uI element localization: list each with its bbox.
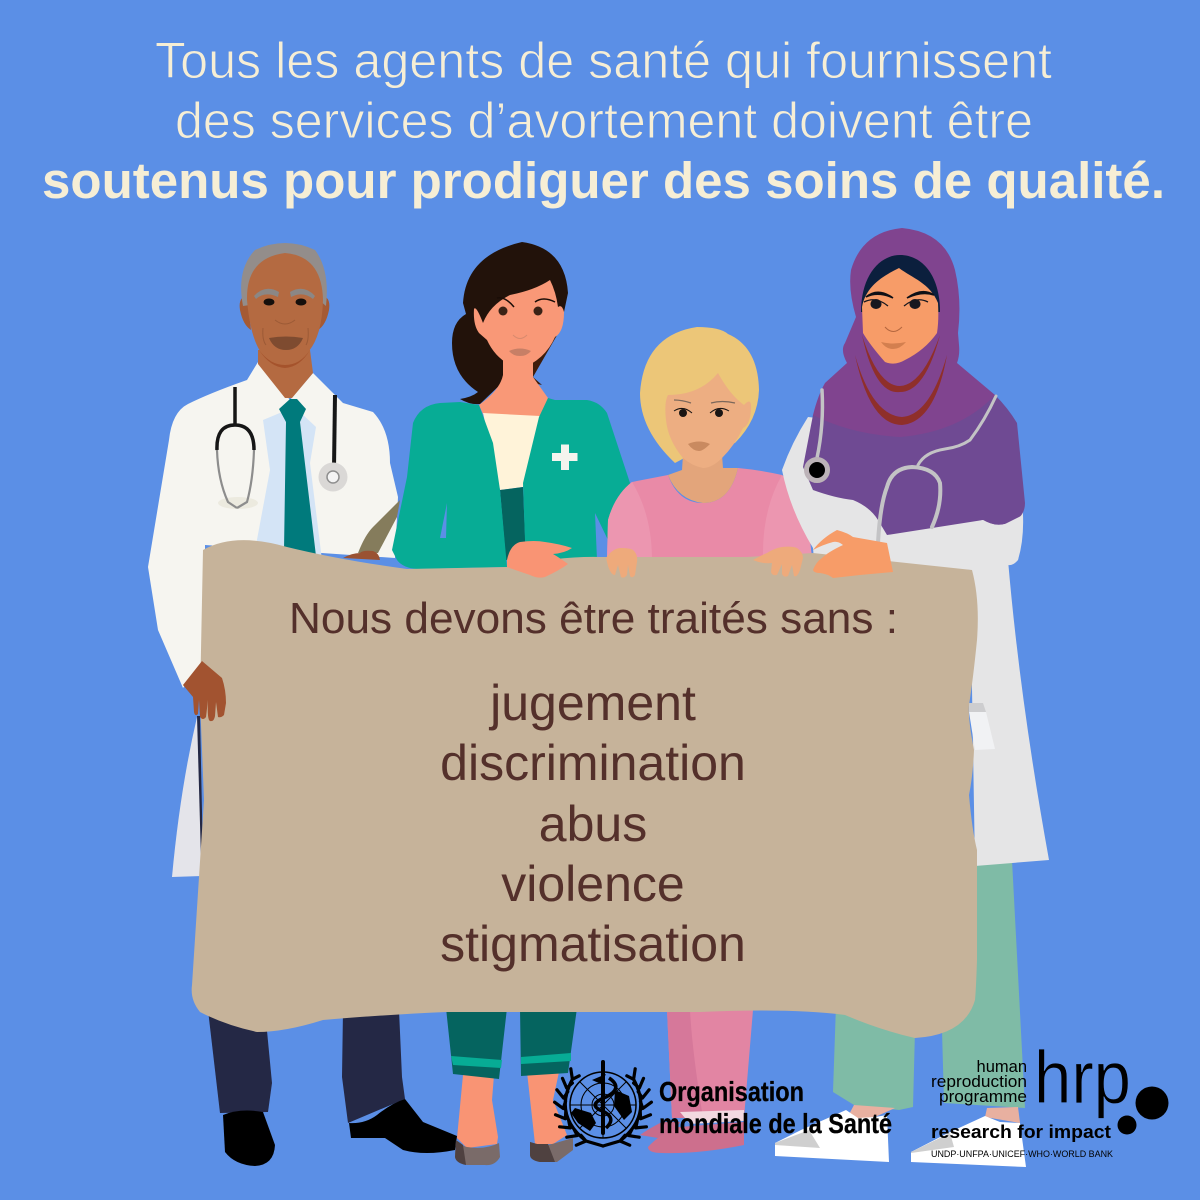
doctor shirt	[256, 410, 322, 560]
doctor neck	[258, 350, 313, 398]
banner list: stigmatisation	[440, 916, 746, 972]
doctor left hand	[183, 661, 226, 721]
WHO wordmark	[659, 1076, 892, 1139]
colleague neck	[668, 455, 738, 503]
HRP tagline: research for impact	[931, 1122, 1111, 1142]
HRP dots	[1118, 1086, 1168, 1134]
woman coat sleeve	[887, 515, 1023, 575]
title	[42, 32, 1165, 209]
figure: male doctor	[148, 243, 457, 1166]
colleague face	[665, 373, 751, 468]
woman hair	[861, 255, 940, 312]
banner list: jugement	[488, 675, 696, 731]
doctor coat	[148, 362, 398, 688]
colleague shoes	[640, 1110, 744, 1153]
title: des services d’avortement doivent être	[175, 92, 1033, 149]
nurse features	[497, 298, 555, 356]
nurse hair	[452, 242, 568, 404]
HRP logo	[931, 1036, 1168, 1159]
nurse trousers	[446, 1008, 577, 1079]
banner list: discrimination	[440, 735, 746, 791]
nurse hair back	[520, 300, 565, 385]
banner list: violence	[501, 856, 685, 912]
HRP partners: UNDP·UNFPA·UNICEF·WHO·WORLD BANK	[931, 1149, 1113, 1159]
colleague features	[674, 400, 735, 451]
nurse sleeve notch	[440, 503, 447, 538]
doctor ears	[240, 296, 329, 330]
colleague sleeves	[607, 475, 812, 560]
woman shoes	[775, 1110, 1026, 1167]
colleague shirt	[607, 468, 812, 560]
nurse shoes	[455, 1138, 573, 1165]
HRP small text: human	[977, 1058, 1027, 1076]
doctor strap and right hand	[343, 500, 400, 560]
woman lower scarf	[803, 395, 1025, 535]
nurse hand	[507, 541, 572, 578]
nurse top	[483, 413, 540, 560]
colleague trousers	[667, 1010, 753, 1118]
nurse legs	[457, 1072, 567, 1148]
banner heading: Nous devons être traités sans :	[289, 594, 898, 643]
HRP small text: reproduction	[931, 1073, 1027, 1091]
emblem staff and serpent	[595, 1062, 616, 1133]
doctor stethoscope	[217, 387, 348, 509]
woman trousers	[833, 860, 1025, 1110]
doctor trousers and shoes	[208, 1010, 457, 1166]
doctor chin shadow	[259, 350, 310, 368]
colleague left hand	[606, 548, 637, 578]
nurse cardigan	[392, 398, 630, 569]
title: soutenus pour prodiguer des soins de qualité.	[42, 152, 1165, 209]
emblem continents	[571, 1074, 632, 1131]
colleague trouser shade	[667, 1010, 703, 1118]
doctor hair	[241, 243, 327, 306]
emblem globe	[570, 1072, 636, 1138]
woman ankles	[846, 1105, 1020, 1123]
emblem left laurel	[555, 1069, 603, 1146]
WHO wordmark: Organisation	[659, 1076, 804, 1107]
woman hand	[813, 530, 893, 578]
HRP letters: hrp	[1034, 1036, 1131, 1119]
doctor coat lower left	[172, 717, 202, 877]
nurse face	[474, 280, 564, 369]
banner	[192, 540, 978, 1038]
woman hijab	[813, 228, 995, 437]
colleague hair	[640, 327, 759, 463]
woman coat pocket	[969, 703, 995, 750]
banner list	[440, 675, 746, 972]
hijab folds	[855, 335, 947, 425]
nurse neck and chest	[479, 350, 548, 417]
HRP small text	[931, 1058, 1027, 1106]
WHO wordmark: mondiale de la Santé	[659, 1108, 892, 1139]
doctor features	[254, 289, 315, 350]
emblem right laurel	[603, 1069, 651, 1146]
colleague right hand	[753, 547, 803, 577]
doctor tie	[279, 399, 316, 556]
figure: blonde colleague	[607, 327, 812, 1153]
HRP small text: programme	[939, 1088, 1027, 1106]
figure: nurse	[392, 242, 630, 1165]
woman features	[864, 292, 934, 349]
woman stethoscope	[806, 390, 996, 543]
title: Tous les agents de santé qui fournissent	[155, 32, 1052, 89]
WHO emblem	[555, 1062, 651, 1146]
doctor face	[247, 253, 323, 367]
nurse cross badge	[552, 444, 578, 470]
woman coat	[782, 417, 1049, 866]
figure: woman doctor in hijab	[775, 228, 1049, 1167]
banner list: abus	[539, 796, 647, 852]
woman face	[862, 268, 938, 364]
doctor trouser sliver	[197, 716, 203, 860]
